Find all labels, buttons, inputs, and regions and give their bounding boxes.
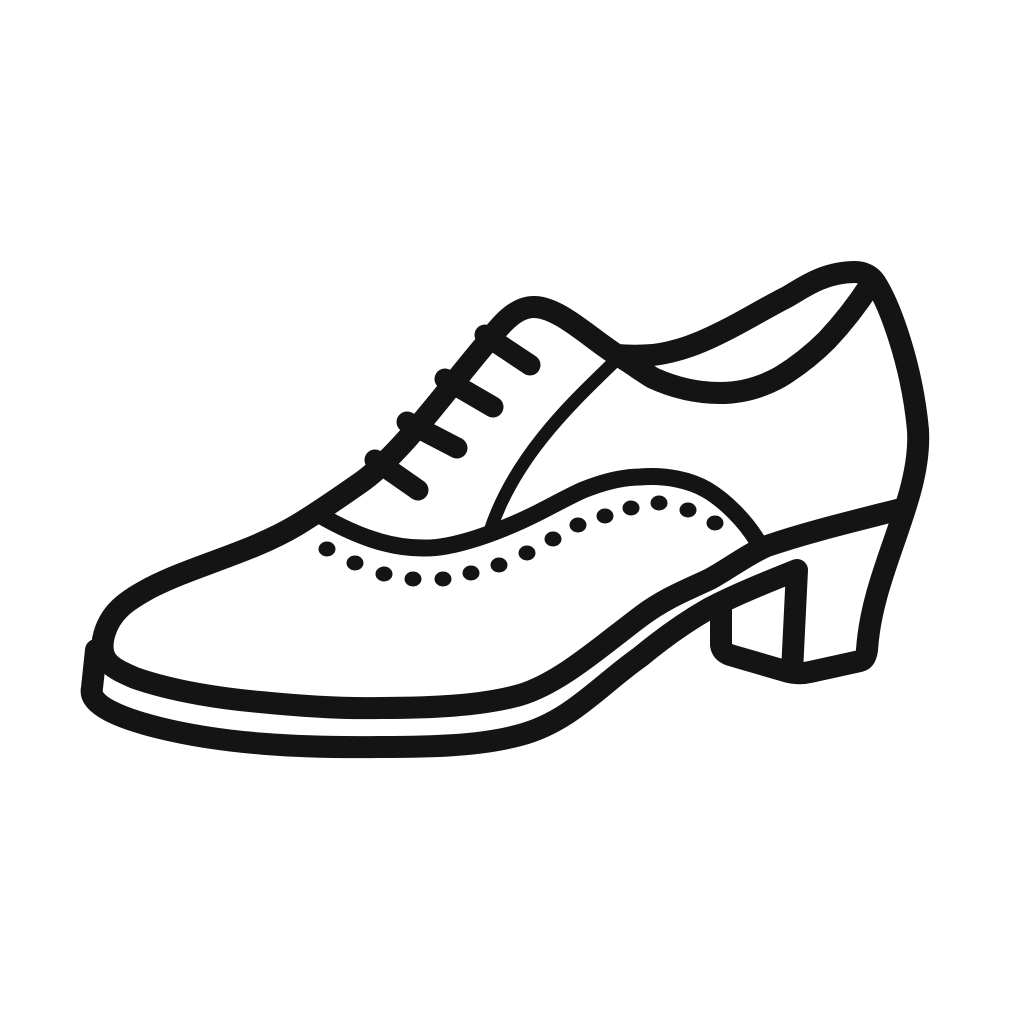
lace 4 [375,460,418,490]
sole [92,570,797,747]
wingtip seam [323,477,758,548]
upper outline and heel [103,272,918,673]
vamp seam [490,363,613,531]
lace 3 [407,422,457,448]
laces [375,335,530,490]
upper bottom edge [103,508,905,708]
collar inner line [617,285,870,393]
lace 1 [485,335,530,365]
brogue dots [318,496,724,586]
lace 2 [445,379,493,407]
